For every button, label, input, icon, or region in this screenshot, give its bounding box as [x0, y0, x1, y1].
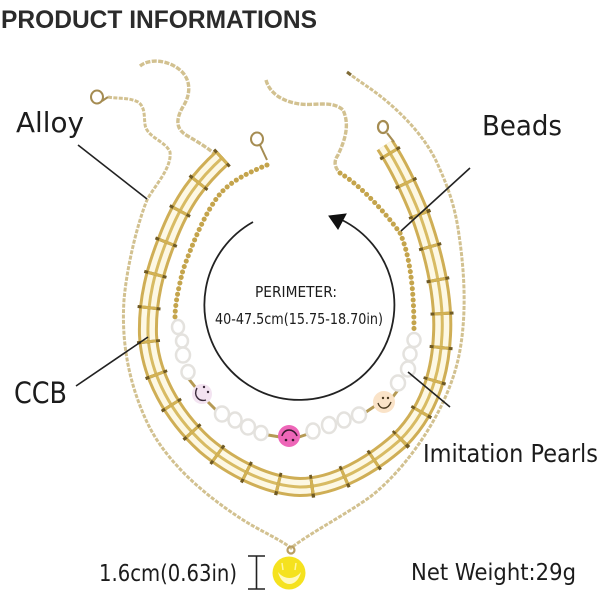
arrow head	[329, 214, 346, 229]
smiley bead: lilac	[192, 384, 212, 404]
label: CCB	[14, 337, 148, 410]
imitation pearls	[172, 320, 420, 440]
necklace: bead chain	[175, 80, 414, 437]
bead clasp	[251, 132, 267, 160]
label: CCB: CCB	[14, 376, 67, 410]
smiley bead: pink	[278, 425, 300, 447]
lobster clasp	[91, 90, 108, 104]
extension end	[347, 72, 351, 75]
smiley bead: peach	[373, 391, 395, 413]
right extension chain	[266, 80, 346, 173]
label: Beads: Beads	[482, 109, 562, 142]
necklace: gold link chain	[140, 61, 442, 487]
necklace: thin alloy chain with pendant	[91, 72, 464, 548]
pendant size dimension: 1.6cm(0.63in)	[99, 559, 237, 587]
bead strand	[175, 165, 267, 318]
label: Alloy: Alloy	[16, 107, 84, 139]
perimeter text	[215, 283, 383, 328]
link chain body	[148, 145, 442, 487]
left extension chain	[140, 61, 216, 155]
net weight: Net Weight:29g	[411, 560, 576, 586]
yellow smiley pendant	[272, 546, 306, 590]
clasp	[378, 121, 394, 142]
label: Alloy	[16, 107, 147, 199]
label: Beads	[401, 109, 562, 231]
perimeter text: 40-47.5cm(15.75-18.70in)	[215, 310, 383, 328]
perimeter text: PERIMETER:	[255, 283, 337, 301]
perimeter arc arrow	[204, 214, 394, 400]
title: PRODUCT INFORMATIONS	[1, 6, 317, 34]
small connector chains	[188, 378, 398, 437]
label: Imitation Pearls	[408, 372, 598, 468]
